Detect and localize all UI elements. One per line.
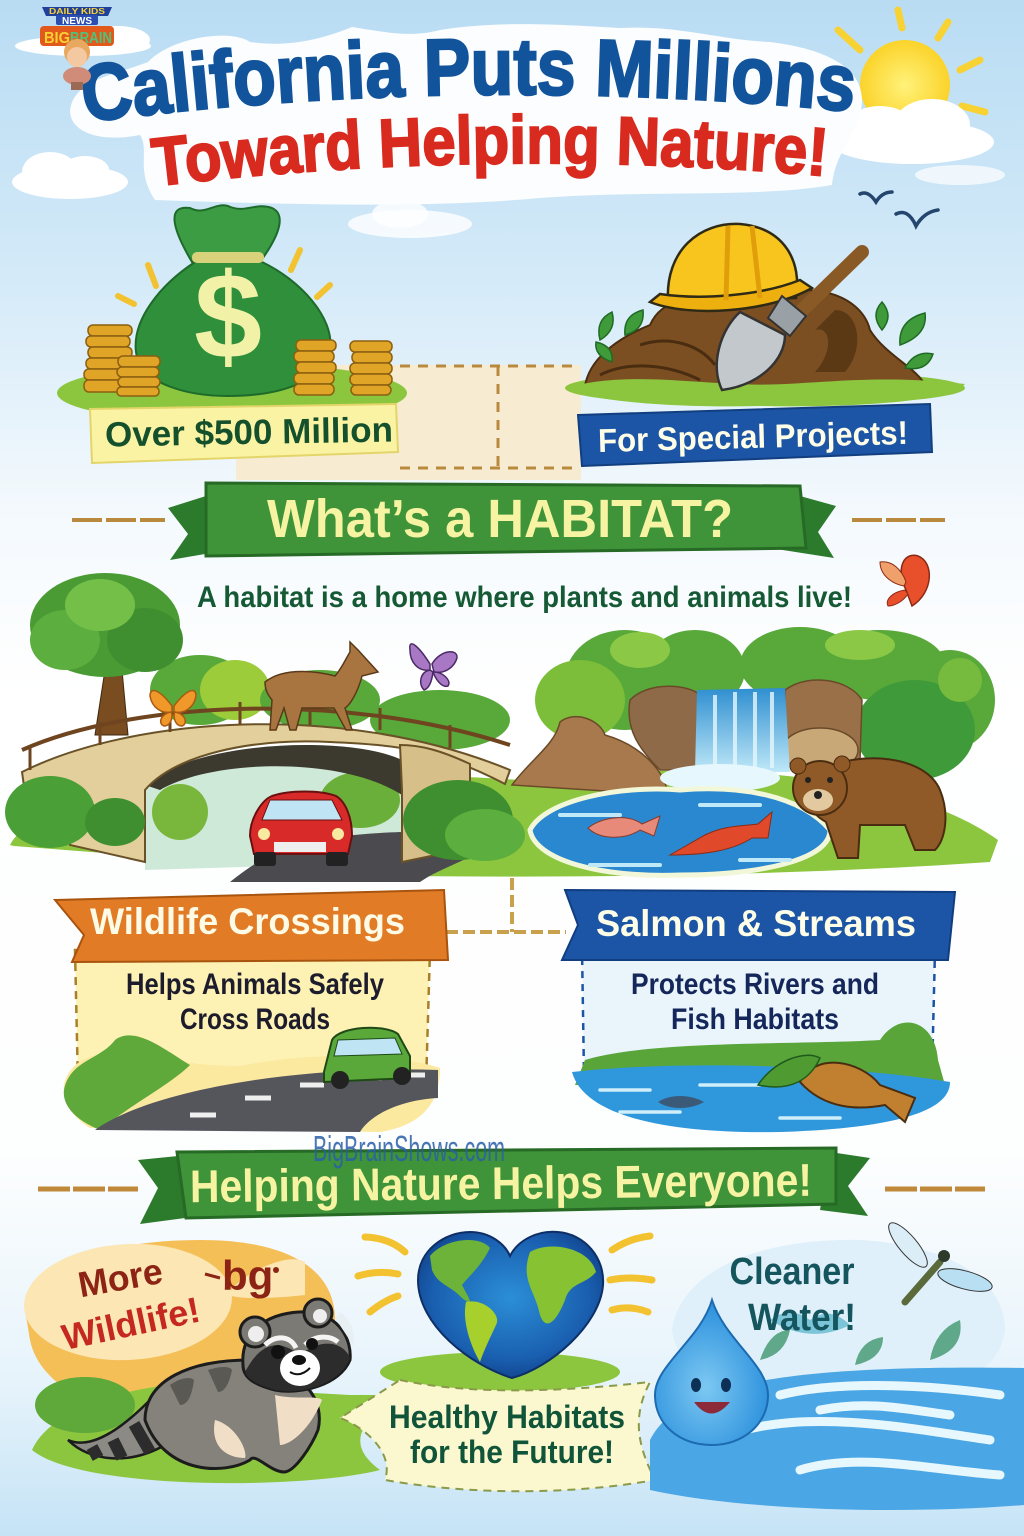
- logo: Daily Kids News with Big Brain: DAILY KIDS: [49, 7, 106, 16]
- logo: Daily Kids News with Big Brain: BRAIN: [70, 30, 112, 47]
- grass base: [565, 370, 965, 406]
- water: [650, 1368, 1024, 1510]
- bridge: [22, 700, 510, 862]
- blue banner: [562, 890, 955, 960]
- icon: earth heart: [418, 1232, 603, 1378]
- orange banner: [55, 890, 448, 962]
- birds: [860, 192, 938, 226]
- icon: dirt mound: [585, 290, 925, 394]
- speech text: Wildlife!: [58, 1289, 204, 1358]
- icon: water drop: [655, 1300, 768, 1445]
- tree: [30, 573, 183, 735]
- text: habitat definition: A habitat is a home where plants and animals live!: [197, 581, 852, 614]
- orange banner: Wildlife Crossings: [90, 901, 405, 942]
- car: [250, 792, 352, 866]
- card text: Cross Roads: [180, 1003, 330, 1036]
- map paper background: [236, 365, 581, 480]
- label shape: [340, 1380, 655, 1491]
- yellow card: [75, 950, 430, 1085]
- grass front: [566, 379, 965, 406]
- panel: wildlife crossings: [55, 890, 448, 1132]
- card text: Helps Animals Safely: [126, 968, 384, 1001]
- title: [70, 24, 862, 205]
- illustration: habitat scene: [5, 573, 998, 882]
- connector lines: [446, 878, 566, 932]
- text: cleaner water: [730, 1251, 856, 1339]
- heading banner: what's a habitat: [168, 483, 836, 560]
- logo: Daily Kids News with Big Brain: NEWS: [62, 16, 92, 27]
- road scene: [64, 1028, 440, 1132]
- heading banner: what's a habitat: What’s a HABITAT?: [267, 489, 733, 549]
- panel: special projects: [565, 224, 965, 466]
- text: cleaner water: Cleaner: [730, 1251, 855, 1293]
- blue card: [582, 950, 935, 1075]
- title line 2: Toward Helping Nature!: [149, 112, 826, 186]
- clouds: [12, 26, 1005, 238]
- speech bubble: [21, 1239, 335, 1420]
- ground: [10, 771, 998, 877]
- head: [243, 1312, 350, 1391]
- panel: healthy habitats: [340, 1232, 655, 1491]
- bushes left: [5, 776, 145, 848]
- rocks: [512, 680, 862, 795]
- icon: coins: [84, 325, 392, 396]
- watermark: BigBrainShows.com: [313, 1128, 505, 1169]
- speech text: More: [75, 1250, 166, 1305]
- logo: Daily Kids News with Big Brain: BIG: [44, 30, 70, 47]
- icon: red butterfly: [880, 555, 929, 606]
- icon: money bag: $: [194, 248, 262, 384]
- card text: Protects Rivers and: [631, 968, 879, 1001]
- bushes centre: [403, 780, 525, 861]
- fish: [588, 816, 660, 837]
- rays: [358, 1236, 652, 1312]
- icon: leaves: [596, 302, 933, 369]
- bubble: [672, 1240, 1005, 1395]
- card text: [126, 968, 384, 1036]
- fish: [658, 1096, 704, 1108]
- dashes: [38, 1186, 985, 1192]
- pond: [530, 789, 830, 875]
- icon: money bag: [136, 205, 330, 396]
- panel: more wildlife: [21, 1239, 390, 1483]
- title line 1: California Puts Millions: [83, 38, 854, 121]
- road and opening: [145, 752, 402, 870]
- grass: [32, 1385, 390, 1483]
- purple butterfly: [410, 644, 457, 690]
- tail: [68, 1402, 165, 1458]
- dashes: [72, 518, 945, 522]
- waterfall: [660, 688, 790, 792]
- text: cleaner water: Water!: [748, 1297, 856, 1339]
- grass base: [57, 363, 407, 423]
- label: for special projects: [578, 404, 932, 466]
- panel: cleaner water: [650, 1218, 1024, 1510]
- beaver and leaf: [800, 1063, 915, 1122]
- sun: [838, 10, 985, 130]
- logo: Daily Kids News with Big Brain: [40, 7, 114, 90]
- icon: hard hat: [650, 224, 812, 311]
- blue banner: Salmon & Streams: [596, 903, 916, 944]
- body: [145, 1360, 319, 1472]
- sparkles: [118, 250, 330, 304]
- grass under earth: [380, 1352, 620, 1392]
- bear: [790, 756, 945, 858]
- speech text: [58, 1250, 279, 1358]
- label text: [389, 1399, 625, 1470]
- panel: salmon and streams: [562, 890, 955, 1132]
- icon: dragonfly: [883, 1218, 994, 1302]
- orange butterfly: [150, 691, 196, 726]
- trees behind right: [150, 627, 995, 780]
- label text: for the Future!: [410, 1434, 614, 1470]
- panel: money: [57, 205, 407, 463]
- icon: shovel: [717, 252, 862, 390]
- stream scene: [572, 1023, 950, 1132]
- deer: [265, 642, 378, 730]
- label: over 500 million: Over $500 Million: [105, 411, 393, 455]
- card text: [631, 968, 879, 1036]
- green car: [324, 1028, 411, 1089]
- card text: Fish Habitats: [671, 1003, 839, 1036]
- heading banner: helping nature: Helping Nature Helps Everyone!: [190, 1154, 812, 1212]
- raccoon: [68, 1299, 354, 1472]
- label: over 500 million: [90, 404, 398, 463]
- speech text: bg: [222, 1252, 273, 1299]
- label text: Healthy Habitats: [389, 1399, 625, 1435]
- plants: [760, 1320, 961, 1365]
- label: for special projects: For Special Projects!: [598, 414, 908, 459]
